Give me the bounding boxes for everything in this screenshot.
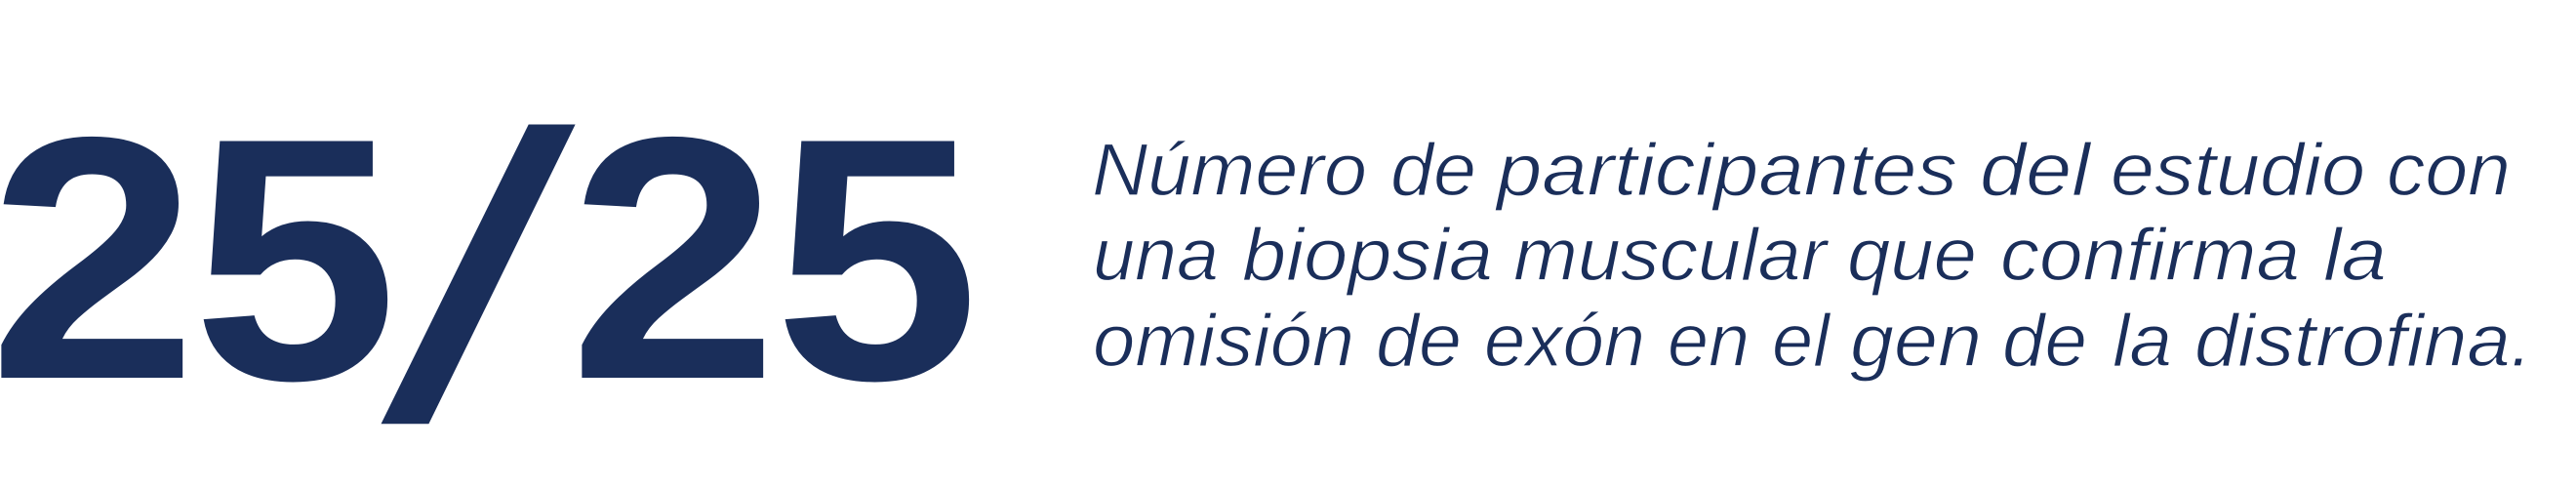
- description text: que: [1847, 214, 1977, 297]
- description text: una: [1093, 214, 1219, 297]
- description text: muscular: [1513, 214, 1830, 297]
- big number: 25/25: [0, 53, 980, 489]
- big number: 25/25: 5: [192, 65, 398, 452]
- description text: estudio: [2111, 129, 2365, 212]
- description text: biopsia: [1242, 214, 1493, 297]
- description text: Número: [1092, 129, 1367, 212]
- description text: participantes: [1495, 129, 1957, 212]
- big number: 25/25: /: [353, 53, 602, 489]
- description text: con: [2387, 129, 2511, 212]
- description text: de: [1390, 129, 1476, 212]
- description text: distrofina.: [2194, 300, 2532, 383]
- description text: de: [1376, 300, 1462, 383]
- description text: omisión: [1093, 300, 1354, 383]
- big number: 25/25: 5: [774, 65, 980, 452]
- description text: en: [1668, 300, 1750, 383]
- description text: el: [1772, 300, 1831, 383]
- description text: la: [2323, 214, 2387, 297]
- big number: 25/25: 2: [569, 66, 779, 452]
- description text: de: [2002, 300, 2087, 383]
- description text: gen: [1850, 300, 1982, 383]
- description text: del: [1980, 129, 2092, 212]
- description text: exón: [1484, 300, 1645, 383]
- description text: la: [2113, 300, 2172, 383]
- description text: [1092, 129, 2532, 383]
- description text: confirma: [2000, 214, 2300, 297]
